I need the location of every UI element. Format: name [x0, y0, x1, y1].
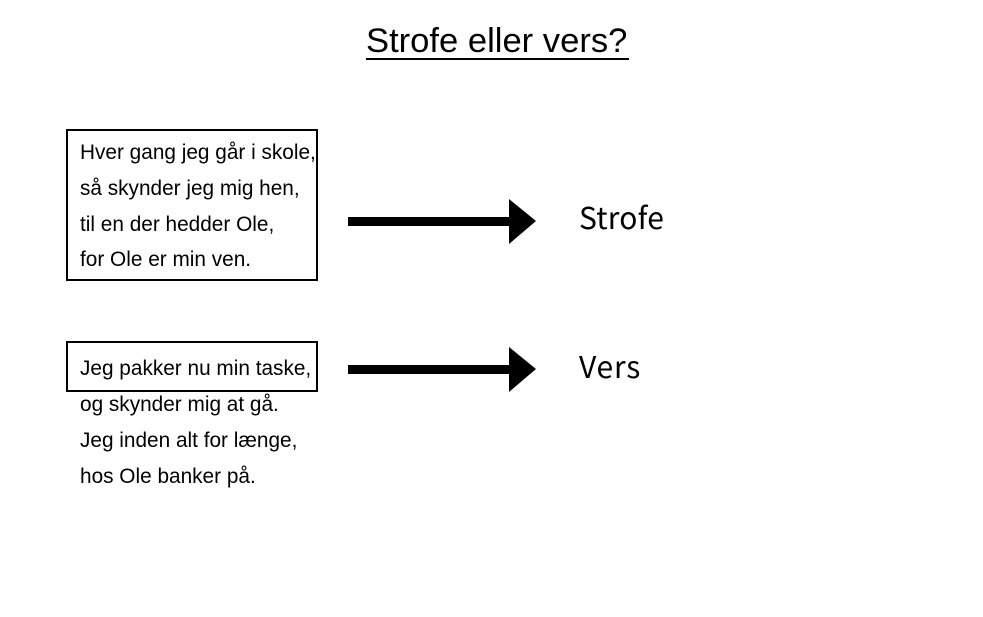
panel: vers example box	[66, 341, 318, 392]
panel: strofe example box	[66, 129, 318, 281]
text block: strofe poem: til en der hedder Ole,	[80, 213, 274, 236]
text block: vers poem	[80, 357, 311, 488]
text block: vers poem: Jeg pakker nu min taske,	[80, 357, 311, 380]
text block: strofe poem: så skynder jeg mig hen,	[80, 177, 300, 200]
arrow: strofe	[348, 199, 536, 244]
text block: strofe poem: for Ole er min ven.	[80, 248, 251, 271]
arrow: vers	[348, 347, 536, 392]
text block: vers poem: hos Ole banker på.	[80, 465, 256, 488]
title: Strofe eller vers?	[366, 22, 627, 60]
text block: vers poem: og skynder mig at gå.	[80, 393, 279, 416]
label: vers: Vers	[579, 343, 641, 387]
label: strofe: Strofe	[579, 194, 664, 238]
text block: strofe poem	[80, 141, 316, 271]
text block: strofe poem: Hver gang jeg går i skole,	[80, 141, 316, 164]
text block: vers poem: Jeg inden alt for længe,	[80, 429, 297, 452]
